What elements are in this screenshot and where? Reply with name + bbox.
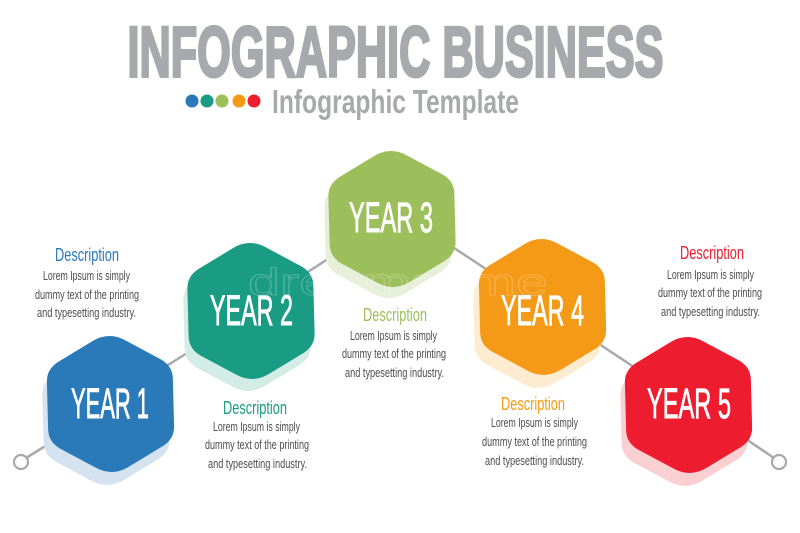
label: year 3: YEAR 3	[349, 194, 433, 242]
text block: year 3 description: and typesetting industry.	[345, 366, 444, 380]
timeline connector	[26, 242, 774, 458]
text block: year 4 description: dummy text of the printing	[482, 435, 587, 449]
hexagon: year 2	[182, 241, 316, 393]
hexagon: year 3	[323, 149, 457, 300]
hexagon: year 4	[472, 237, 607, 390]
subtitle: Infographic Template	[272, 83, 519, 120]
colour dots	[186, 94, 260, 108]
text block: year 1 description: and typesetting industry.	[37, 306, 136, 320]
text block: year 5 description: Lorem Ipsum is simply	[667, 268, 755, 282]
text block: year 3 description	[342, 305, 446, 380]
text block: year 5 description: dummy text of the printing	[658, 286, 762, 300]
text block: year 1 description	[35, 245, 139, 320]
start node	[14, 455, 28, 469]
text block: year 5 description: and typesetting industry.	[661, 305, 760, 319]
text block: year 2 description: dummy text of the printing	[205, 438, 309, 452]
text block: year 1 description: Description	[55, 245, 119, 265]
text block: year 1 description: Lorem Ipsum is simply	[43, 269, 131, 283]
text block: year 5 description: Description	[680, 243, 744, 263]
hexagon: year 1	[41, 334, 175, 487]
text block: year 3 description: Description	[363, 305, 427, 325]
text block: year 3 description: Lorem Ipsum is simply	[350, 329, 438, 343]
text block: year 3 description: dummy text of the printing	[342, 347, 446, 361]
end node	[772, 455, 786, 469]
text block: year 2 description: Lorem Ipsum is simply	[213, 420, 301, 434]
text block: year 2 description	[205, 398, 309, 471]
text block: year 2 description: Description	[223, 398, 287, 418]
text block: year 4 description	[482, 394, 587, 468]
text block: year 2 description: and typesetting industry.	[208, 457, 307, 471]
text block: year 4 description: Description	[501, 394, 565, 414]
watermark: dreamstime	[248, 262, 548, 304]
label: year 2: YEAR 2	[210, 287, 293, 335]
label: year 1: YEAR 1	[71, 380, 149, 428]
label: year 5: YEAR 5	[647, 380, 731, 428]
text block: year 4 description: Lorem Ipsum is simply	[491, 416, 579, 430]
text block: year 4 description: and typesetting industry.	[485, 454, 584, 468]
text block: year 5 description	[658, 243, 762, 319]
text block: year 1 description: dummy text of the printing	[35, 288, 139, 302]
hexagon: year 5	[619, 335, 753, 488]
label: year 4: YEAR 4	[501, 287, 584, 335]
